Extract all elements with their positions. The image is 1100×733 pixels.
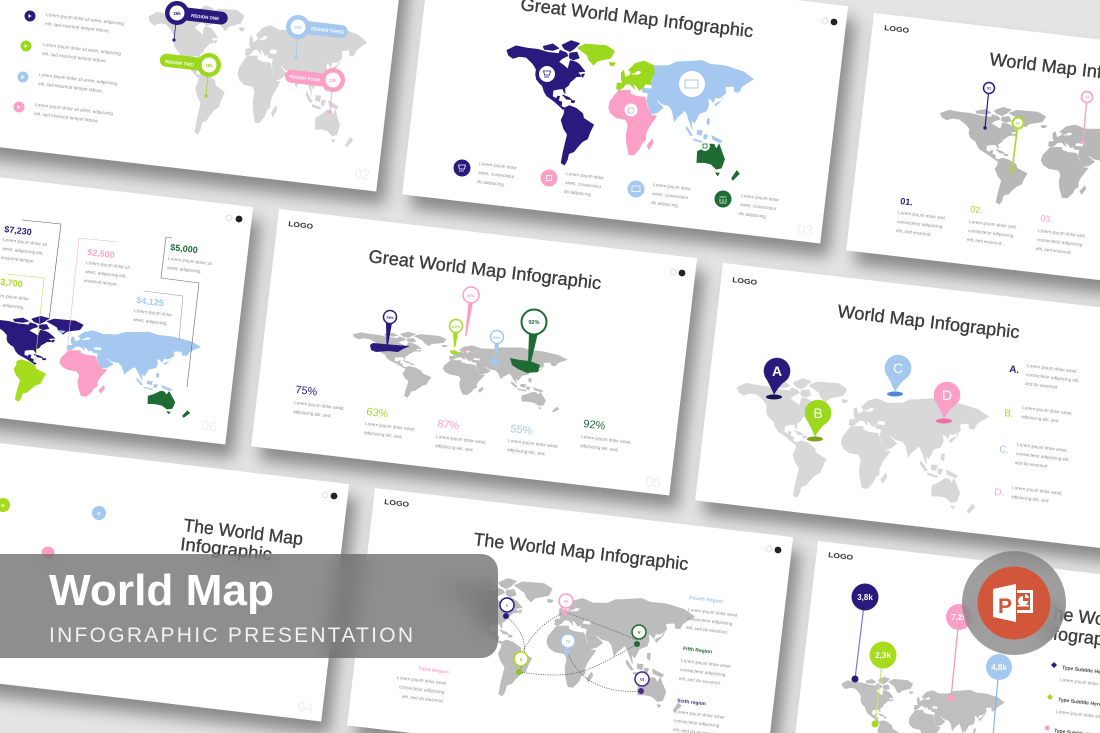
pin 01 xyxy=(983,82,994,130)
page number: 03 xyxy=(797,221,814,239)
pin 03 xyxy=(1081,92,1092,144)
title: Infographic xyxy=(179,534,273,564)
fifth region text: Fifth Region xyxy=(683,646,712,655)
pins: B xyxy=(1,503,5,508)
panel: slide 04 partly hidden xyxy=(0,435,349,721)
legend text: amet, consectetur xyxy=(740,202,777,211)
pin 75%: 75% xyxy=(386,315,394,320)
legend text: do adipiscing. xyxy=(477,179,505,187)
panel: slide 02 regions xyxy=(0,0,404,191)
pin 55%: 55% xyxy=(493,335,501,340)
value $7,230: Lorem ipsum dolor sit xyxy=(3,237,48,247)
region four marker xyxy=(284,68,345,114)
logo: LOGO xyxy=(384,499,410,509)
logo: LOGO xyxy=(288,221,314,231)
fifth region text: Lorem ipsum dolor amet xyxy=(681,658,731,669)
stat 63% xyxy=(364,406,416,441)
world map grey xyxy=(931,100,1100,225)
region two marker xyxy=(159,53,221,98)
pin C xyxy=(885,355,911,396)
page number: 06 xyxy=(201,417,218,435)
bubble 2,3k: 2,3k xyxy=(875,651,891,660)
sixth region text: consectetur adipiscing xyxy=(674,718,720,728)
legend B xyxy=(1004,405,1073,425)
pin A xyxy=(764,358,790,400)
pin D: D xyxy=(942,387,952,403)
region one marker: 25k xyxy=(173,11,181,16)
title: The World Map xyxy=(183,515,304,549)
pin B: B xyxy=(813,405,823,421)
captions: elit, sed eiusmod. xyxy=(896,228,932,237)
pin 02: 02 xyxy=(1016,122,1020,126)
pin 92%: 92% xyxy=(528,320,540,326)
world map grey xyxy=(725,371,990,519)
title xyxy=(179,515,304,568)
pin 03: 03 xyxy=(1085,96,1089,100)
stat 87%: 87% xyxy=(437,418,460,433)
map icon badges xyxy=(539,66,710,151)
legend B: Lorem ipsum dolor amet, xyxy=(1022,405,1073,416)
logo: LOGO xyxy=(884,25,910,35)
value $4,125: $4,125 xyxy=(136,295,164,308)
logo: LOGO xyxy=(732,277,758,287)
stat 55%: adipiscing elit, sed. xyxy=(507,447,546,456)
value $2,500: amet, adipiscing elit, xyxy=(85,269,127,279)
stat 75%: adipiscing elit, sed. xyxy=(293,409,332,418)
bubble 4,8k xyxy=(986,654,1012,733)
list text: elit, sed eiusmod tempor labore. xyxy=(34,111,99,124)
location pins: VI xyxy=(640,677,644,682)
legend B: B. xyxy=(1004,408,1014,420)
captions: consectetur adipiscing xyxy=(897,219,943,229)
legend C: sed do eiusmod xyxy=(1015,460,1048,469)
region three marker: REGION THREE xyxy=(311,26,345,35)
legend B: adipiscing elit, sed xyxy=(1021,414,1059,423)
title banner xyxy=(0,554,498,658)
value $4,125: amet, adipiscing. xyxy=(133,317,168,326)
location pins: I xyxy=(506,603,508,608)
legend text xyxy=(477,161,780,220)
legend text: Lorem ipsum dolor xyxy=(741,193,780,202)
legend text: do adipiscing. xyxy=(739,211,767,219)
page number: 04 xyxy=(297,698,314,716)
legend text: amet, consectetur xyxy=(478,170,515,179)
pin 87% xyxy=(463,287,479,336)
legend text: amet, consectetur xyxy=(565,180,602,189)
highlighted countries xyxy=(370,343,540,373)
panel: slide 10 stat bubbles xyxy=(790,541,1100,733)
region one marker: REGION ONE xyxy=(191,13,219,21)
legend text: do adipiscing. xyxy=(564,189,592,197)
legend C: C. xyxy=(999,444,1010,456)
page number: 05 xyxy=(645,473,662,491)
panel: slide 06 value callouts xyxy=(0,158,253,444)
pin A: A xyxy=(772,363,782,379)
bubble 2,3k xyxy=(870,642,896,728)
value $4,125: Lorem ipsum dolor xyxy=(134,308,173,317)
list text: Lorem ipsum dolor sit amet, adipiscing xyxy=(39,72,118,86)
location pins: III xyxy=(564,599,568,604)
list text: Lorem ipsum dolor sit amet, adipiscing xyxy=(46,12,125,26)
stat 63%: adipiscing elit, sed. xyxy=(364,430,403,439)
fourth region text: Lorem ipsum dolor amet xyxy=(688,607,738,618)
list icons xyxy=(14,10,36,112)
value $2,500: Lorem ipsum dolor sit xyxy=(86,260,131,270)
nav dots xyxy=(766,546,781,553)
legend A: Lorem ipsum dolor amet, xyxy=(1027,363,1078,374)
sixth region text: Sixth region xyxy=(677,698,706,707)
value $5,000: $5,000 xyxy=(170,242,198,255)
captions: elit, sed eiusmod. xyxy=(967,237,1003,246)
legend C: consectetur adipiscing elit, xyxy=(1016,451,1070,462)
value $2,500: eiusmod tempor. xyxy=(84,278,118,287)
value $7,230: eiusmod tempor. xyxy=(1,255,35,264)
value $5,000 xyxy=(167,242,213,275)
nav dots xyxy=(226,215,242,222)
legend text: do adipiscing. xyxy=(651,200,679,208)
pin 63% xyxy=(450,320,462,347)
pins xyxy=(0,498,106,560)
bubble 7,2k xyxy=(946,604,972,702)
region three marker xyxy=(286,15,348,60)
third region text: elit, sed do eiusmod. xyxy=(402,694,444,704)
world map grey xyxy=(346,326,568,415)
legend icons xyxy=(454,160,732,208)
stat 92%: 92% xyxy=(583,418,606,433)
list text: elit, sed eiusmod tempor labore. xyxy=(42,51,107,64)
legend xyxy=(1044,662,1100,733)
banner subtitle: INFOGRAPHIC PRESENTATION xyxy=(49,624,413,647)
legend D: D. xyxy=(994,487,1005,499)
pin 87%: 87% xyxy=(467,293,475,298)
bubble 3,8k: 3,8k xyxy=(857,593,873,602)
value $3,700 xyxy=(0,276,30,310)
list text: Lorem ipsum dolor sit amet, adipiscing xyxy=(35,102,114,116)
location pins xyxy=(500,594,649,694)
captions: 01. xyxy=(900,196,913,207)
list text: elit, sed eiusmod tempor labore. xyxy=(45,21,110,34)
legend: Lorem ipsum dolor sit xyxy=(1056,709,1100,719)
region three marker: 37k xyxy=(294,25,302,30)
legend A: sed do eiusmod xyxy=(1025,381,1058,390)
stat 87%: adipiscing elit, sed. xyxy=(435,443,474,452)
captions: 02. xyxy=(970,204,983,215)
region four marker: 23k xyxy=(329,78,337,83)
region four marker: REGION FOUR xyxy=(289,74,321,83)
banner heading: World Map xyxy=(49,566,274,615)
value $7,230: amet, adipiscing elit, xyxy=(2,246,44,256)
captions xyxy=(896,196,1086,256)
fourth region text: consectetur adipiscing xyxy=(687,616,733,626)
third region text xyxy=(395,666,449,704)
list text xyxy=(34,12,125,125)
captions: 03. xyxy=(1040,213,1053,224)
stat 75% xyxy=(293,384,345,420)
legend A xyxy=(1009,363,1081,392)
third region text: consectetur adipiscing xyxy=(399,684,445,695)
world map grey xyxy=(136,0,369,152)
page number: 02 xyxy=(354,165,371,183)
fourth region text xyxy=(686,595,738,636)
bubble 3,8k xyxy=(852,584,878,682)
legend text: Lorem ipsum dolor xyxy=(653,182,692,191)
stat 92%: adipiscing elit, sed. xyxy=(580,443,619,452)
stat 87% xyxy=(435,418,487,454)
legend A: A. xyxy=(1009,364,1020,376)
icon: PowerPoint badge xyxy=(962,551,1066,655)
fifth region text: elit, sed do eiusmod. xyxy=(679,676,721,686)
fifth region text xyxy=(679,646,731,687)
pin B xyxy=(805,400,831,442)
legend text: amet, consectetur xyxy=(652,191,689,200)
pin 75% xyxy=(384,310,396,345)
bubble 4,8k: 4,8k xyxy=(991,663,1007,672)
legend D: Lorem ipsum dolor amet, xyxy=(1012,485,1063,496)
location pins: IV xyxy=(566,639,570,644)
legend C: Lorem ipsum dolor amet, xyxy=(1017,442,1068,453)
title: The World Map Infographic xyxy=(473,529,689,574)
connector lines xyxy=(7,220,199,387)
stat 55%: 55% xyxy=(510,423,533,438)
fourth region text: Fourth Region xyxy=(689,595,723,605)
pins: D xyxy=(97,511,101,516)
pin D xyxy=(934,382,960,424)
list text: Lorem ipsum dolor sit amet, adipiscing xyxy=(43,42,122,56)
third region text: Lorem ipsum dolor amet xyxy=(397,675,447,686)
nav dots xyxy=(322,492,337,499)
coloured world map xyxy=(494,33,755,186)
fifth region text: consectetur adipiscing xyxy=(680,667,726,677)
panel: slide 01 numbered pins xyxy=(846,13,1100,299)
value $7,230 xyxy=(1,224,48,265)
logo: LOGO xyxy=(828,552,854,562)
region two marker: 18k xyxy=(205,63,213,68)
world map grey xyxy=(430,571,696,717)
value $2,500 xyxy=(84,247,131,288)
list text: elit, sed eiusmod tempor labore. xyxy=(38,81,103,94)
captions: consectetur adipiscing xyxy=(968,228,1014,238)
captions: Lorem ipsum dolor sed, xyxy=(969,219,1017,230)
captions: Lorem ipsum dolor sed, xyxy=(1038,228,1086,239)
nav dots xyxy=(822,18,837,25)
nav dots xyxy=(670,269,685,276)
legend D xyxy=(994,485,1063,505)
pin 55% xyxy=(490,330,504,356)
pin 63%: 63% xyxy=(452,324,460,329)
pin C: C xyxy=(893,360,903,376)
title: Great World Map Infographic xyxy=(368,246,602,293)
stat 92%: Lorem ipsum dolor amet, xyxy=(581,434,632,445)
panel: slide 03 coloured map xyxy=(402,0,848,243)
sixth region text: Lorem ipsum dolor amet xyxy=(675,709,725,720)
stat 87%: Lorem ipsum dolor amet, xyxy=(436,434,487,445)
value $4,125 xyxy=(133,295,173,326)
location pins: V xyxy=(638,630,641,635)
stat 63%: Lorem ipsum dolor amet, xyxy=(365,421,416,432)
coloured world map xyxy=(0,309,202,422)
world map grey xyxy=(834,672,1006,733)
stat 55%: Lorem ipsum dolor amet, xyxy=(508,438,559,449)
pin 01: 01 xyxy=(987,86,991,90)
title xyxy=(1037,602,1100,656)
dotted routes xyxy=(506,612,641,691)
panel: slide 07 lettered pins xyxy=(695,263,1100,549)
stat 63%: 63% xyxy=(366,406,389,421)
fourth region text: elit, sed do eiusmod. xyxy=(686,625,728,635)
bubble 7,2k: 7,2k xyxy=(951,613,967,622)
third region text: Third Region xyxy=(418,666,449,676)
captions: Lorem ipsum dolor sed, xyxy=(898,210,946,221)
stat 92% xyxy=(580,418,632,454)
panel: slide 05 percent pins xyxy=(251,209,697,495)
title: World Map Infographic xyxy=(837,301,1021,342)
stat 55% xyxy=(507,423,559,458)
stat 75%: Lorem ipsum dolor amet, xyxy=(294,400,345,411)
stat 75%: 75% xyxy=(295,384,318,399)
legend C xyxy=(999,442,1071,471)
pin 02 xyxy=(1010,118,1024,173)
legend text: Lorem ipsum dolor xyxy=(479,161,518,170)
value $5,000: Lorem ipsum dolor sit xyxy=(168,256,213,266)
region one marker xyxy=(165,1,228,42)
legend A: consectetur adipiscing elit, xyxy=(1026,372,1080,383)
legend D: adipiscing elit, sed xyxy=(1011,494,1049,503)
value $7,230: $7,230 xyxy=(4,224,32,237)
region two marker: REGION TWO xyxy=(165,59,195,67)
panel: slide 09 route map xyxy=(347,488,793,733)
sixth region text xyxy=(673,698,725,733)
value $5,000: amet, adipiscing. xyxy=(167,265,202,274)
location pins: II xyxy=(520,657,522,662)
legend text: Lorem ipsum dolor xyxy=(566,171,605,180)
pin 92% xyxy=(522,310,546,364)
captions: elit, sed eiusmod. xyxy=(1036,246,1072,255)
icon: PowerPoint badge: P xyxy=(998,595,1012,618)
value $2,500: $2,500 xyxy=(87,247,115,260)
captions: consectetur adipiscing xyxy=(1037,237,1083,247)
